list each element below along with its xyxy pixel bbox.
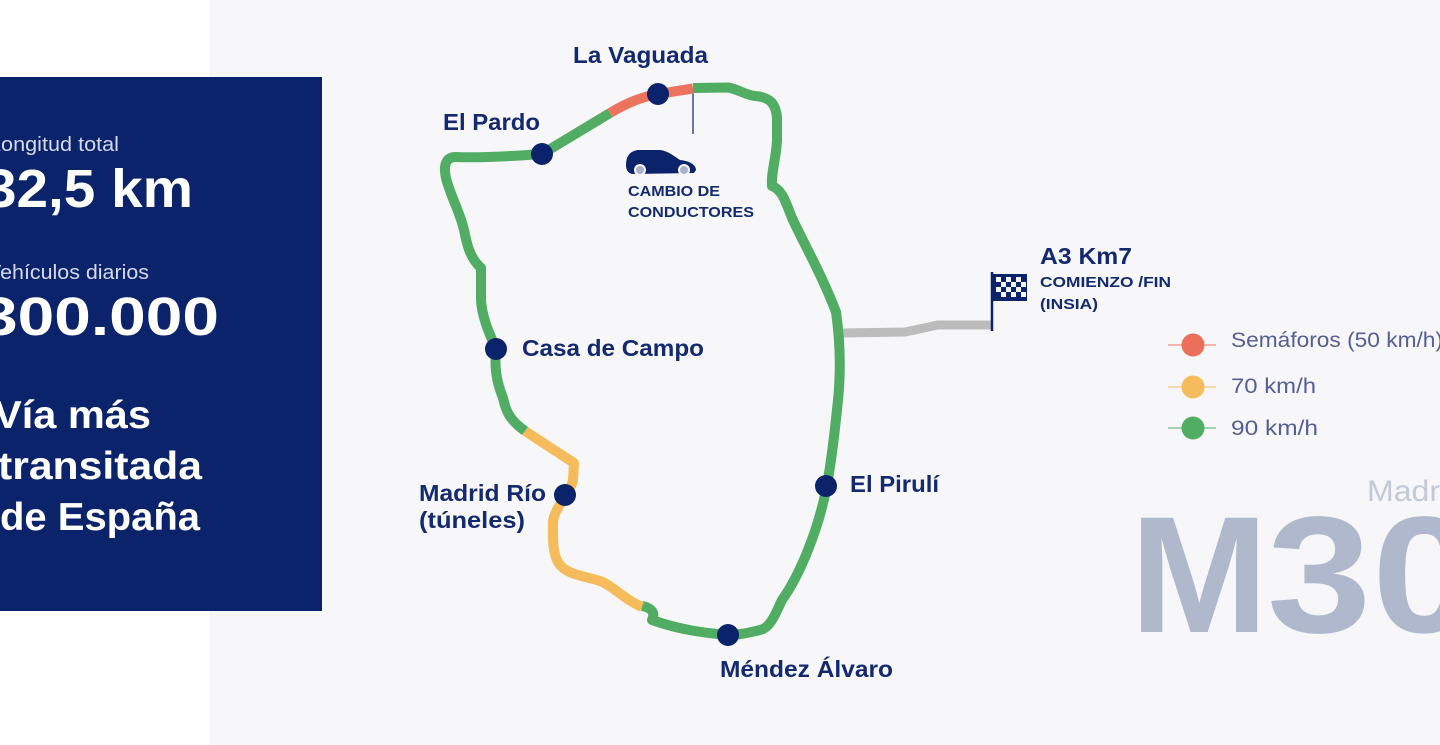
icon: checkered flag (992, 272, 1027, 331)
title: M30 (1130, 482, 1440, 668)
text: start and finish: COMIENZO /FIN (1040, 274, 1171, 291)
text: start and finish (1040, 243, 1171, 313)
stop: Madrid Río: Madrid Río (419, 480, 546, 506)
text: busiest road statement: transitada (0, 445, 202, 488)
stop: La Vaguada: La Vaguada (573, 42, 708, 68)
legend item: 70 km/h (1168, 375, 1316, 398)
stop: Méndez Álvaro (717, 624, 893, 682)
text: busiest road statement: de España (0, 496, 200, 539)
panel: key figures (0, 77, 322, 611)
segment: 90 km/h west and north (445, 113, 610, 431)
connector: A3 access road (842, 325, 992, 333)
stop: El Pirulí (815, 471, 941, 497)
legend item: 90 km/h (1168, 416, 1318, 440)
title: M30: 3 (1267, 482, 1371, 668)
title: M30: M (1130, 483, 1268, 668)
stop: Madrid Río (419, 480, 576, 533)
legend: speed limits (1168, 329, 1440, 440)
segment: traffic lights (610, 88, 693, 113)
text: busiest road statement (0, 394, 202, 539)
legend item: traffic lights (1168, 329, 1440, 356)
stop: La Vaguada (573, 42, 708, 105)
stop: El Pardo (443, 109, 553, 165)
stop: Méndez Álvaro: Méndez Álvaro (720, 655, 893, 682)
text: start and finish: A3 Km7 (1040, 243, 1132, 269)
stop: El Pirulí: El Pirulí (850, 471, 941, 497)
line: driver change marker (692, 90, 694, 134)
text: driver change: CAMBIO DE (628, 183, 720, 200)
stop: El Pardo: El Pardo (443, 109, 540, 135)
text: driver change (628, 183, 754, 221)
route: M30 ring (445, 88, 840, 635)
segment: 90 km/h east and south (642, 88, 840, 635)
segment: 70 km/h Madrid Río (525, 431, 642, 607)
text: start and finish: (INSIA) (1040, 296, 1098, 313)
text: driver change: CONDUCTORES (628, 204, 754, 221)
stop: Casa de Campo: Casa de Campo (522, 335, 704, 361)
legend item: 70 km/h: 70 km/h (1231, 375, 1316, 398)
legend item: traffic lights: Semáforos (50 km/h) (1231, 329, 1440, 352)
legend item: 90 km/h: 90 km/h (1231, 417, 1318, 440)
icon: car (626, 150, 696, 175)
stop: Madrid Río: (túneles) (419, 507, 525, 533)
